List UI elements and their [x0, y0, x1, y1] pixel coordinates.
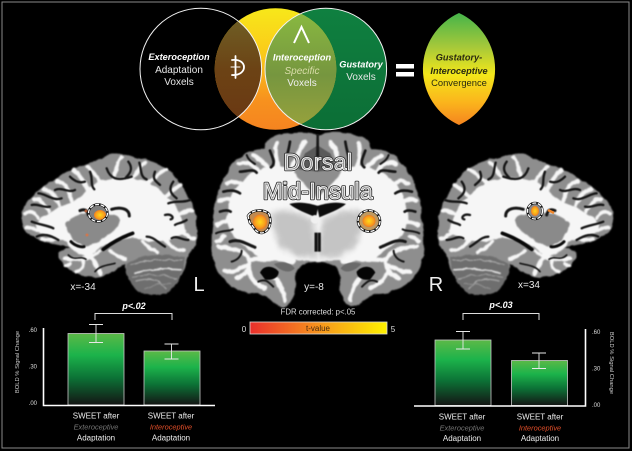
heading: Dorsal Mid-Insula: Mid-Insula: [263, 178, 373, 204]
scale max: 5: [391, 325, 396, 334]
text: gustatory voxels: Gustatory: [339, 60, 384, 70]
bar chart: left: [15, 301, 215, 442]
y axis label: BOLD % Signal Change: [15, 331, 21, 393]
heading: Dorsal Mid-Insula: Mid-Insula: [263, 178, 373, 204]
heading: Dorsal Mid-Insula: Dorsal: [284, 149, 352, 175]
significance bracket: p<.02: [121, 301, 146, 311]
text: gustatory voxels: Voxels: [346, 72, 376, 83]
x label 1: [439, 412, 486, 443]
convergence leaf: [423, 13, 495, 125]
x label 1: SWEET after: [439, 412, 486, 422]
axes: [414, 329, 586, 406]
color bar: [250, 322, 387, 334]
error bars: [89, 324, 178, 359]
axes: [44, 328, 215, 406]
overlap: interoception and gustatory: [266, 14, 336, 124]
circle: gustatory voxels: [265, 8, 387, 130]
label: R hemisphere: R: [429, 274, 443, 296]
text: interoception specific voxels: Interoception: [273, 52, 331, 62]
y ticks: .30: [592, 366, 601, 372]
y ticks: .60: [592, 330, 601, 336]
error bars: [456, 332, 546, 368]
x label 2: [148, 412, 195, 442]
y ticks: .00: [592, 403, 601, 409]
x label 2: Interoceptive: [519, 424, 561, 432]
heading: Dorsal Mid-Insula: [263, 149, 373, 204]
y ticks: .00: [29, 401, 38, 407]
x label 1: [73, 412, 120, 442]
x label 1: SWEET after: [73, 412, 120, 420]
activation cluster: right coronal: [358, 210, 380, 232]
venn diagram: [140, 8, 387, 130]
heading: Dorsal Mid-Insula: Dorsal: [284, 149, 352, 175]
x label 1: Adaptation: [77, 434, 115, 442]
significance bracket: p<.03: [488, 300, 513, 310]
overlap: exteroception and interoception: [214, 22, 262, 116]
y ticks: [592, 330, 601, 409]
label: x=-34: x=-34: [70, 282, 96, 293]
x label 2: Adaptation: [521, 434, 559, 443]
text: exteroception adaptation voxels: Exteroception: [148, 52, 210, 62]
icon: not-superset symbol: [231, 56, 244, 78]
equals sign: [396, 64, 414, 76]
bar: interoceptive: [512, 360, 568, 406]
y axis label: BOLD % Signal Change: [608, 332, 614, 394]
x label 1: Adaptation: [443, 434, 481, 443]
text: gustatory-interoceptive convergence: Interoceptive: [430, 66, 488, 76]
text: interoception specific voxels: [273, 52, 331, 89]
color bar label: t-value: [306, 324, 331, 333]
label: L hemisphere: L: [193, 274, 205, 296]
circle: exteroception adaptation voxels: [140, 8, 262, 130]
text: exteroception adaptation voxels: [148, 52, 210, 88]
legend title: FDR corrected: p<.05: [281, 308, 356, 316]
text: gustatory-interoceptive convergence: Gustatory-: [436, 52, 482, 62]
text: gustatory-interoceptive convergence: Convergence: [431, 77, 487, 88]
y ticks: .30: [29, 364, 38, 370]
x label 1: Exteroceptive: [440, 424, 484, 432]
bar: exteroceptive: [435, 340, 491, 406]
text: exteroception adaptation voxels: Voxels: [164, 77, 194, 88]
circle: interoception: [215, 8, 336, 130]
x label 2: Adaptation: [152, 434, 190, 442]
significance bracket: [95, 301, 172, 320]
scale min: 0: [242, 325, 247, 334]
text: gustatory voxels: [339, 60, 384, 83]
significance bracket: [463, 300, 539, 320]
activation cluster: right sagittal: [528, 203, 554, 219]
activation cluster: left coronal: [248, 210, 270, 233]
color scale legend: [242, 308, 396, 334]
label: x=34: x=34: [518, 280, 540, 291]
y ticks: [29, 328, 38, 407]
x label 1: Exteroceptive: [74, 422, 118, 432]
x label 2: Interoceptive: [150, 422, 192, 432]
label: y=-8: y=-8: [304, 282, 324, 293]
x label 2: [517, 412, 564, 443]
bar chart: right: [414, 300, 614, 443]
x label 2: SWEET after: [148, 412, 195, 420]
y ticks: .60: [29, 328, 38, 334]
bar: interoceptive: [144, 351, 200, 405]
bar: exteroceptive: [68, 334, 124, 405]
text: exteroception adaptation voxels: Adaptation: [155, 65, 203, 76]
text: gustatory-interoceptive convergence: [430, 52, 488, 88]
coronal brain: [212, 133, 424, 307]
sagittal brain: left hemisphere: [22, 154, 197, 295]
sagittal brain: right hemisphere: [438, 154, 613, 295]
icon: wedge symbol: [294, 27, 309, 43]
text: interoception specific voxels: Voxels: [287, 78, 317, 89]
x label 2: SWEET after: [517, 412, 564, 422]
text: interoception specific voxels: Specific: [284, 66, 320, 77]
activation cluster: left sagittal: [84, 204, 108, 236]
